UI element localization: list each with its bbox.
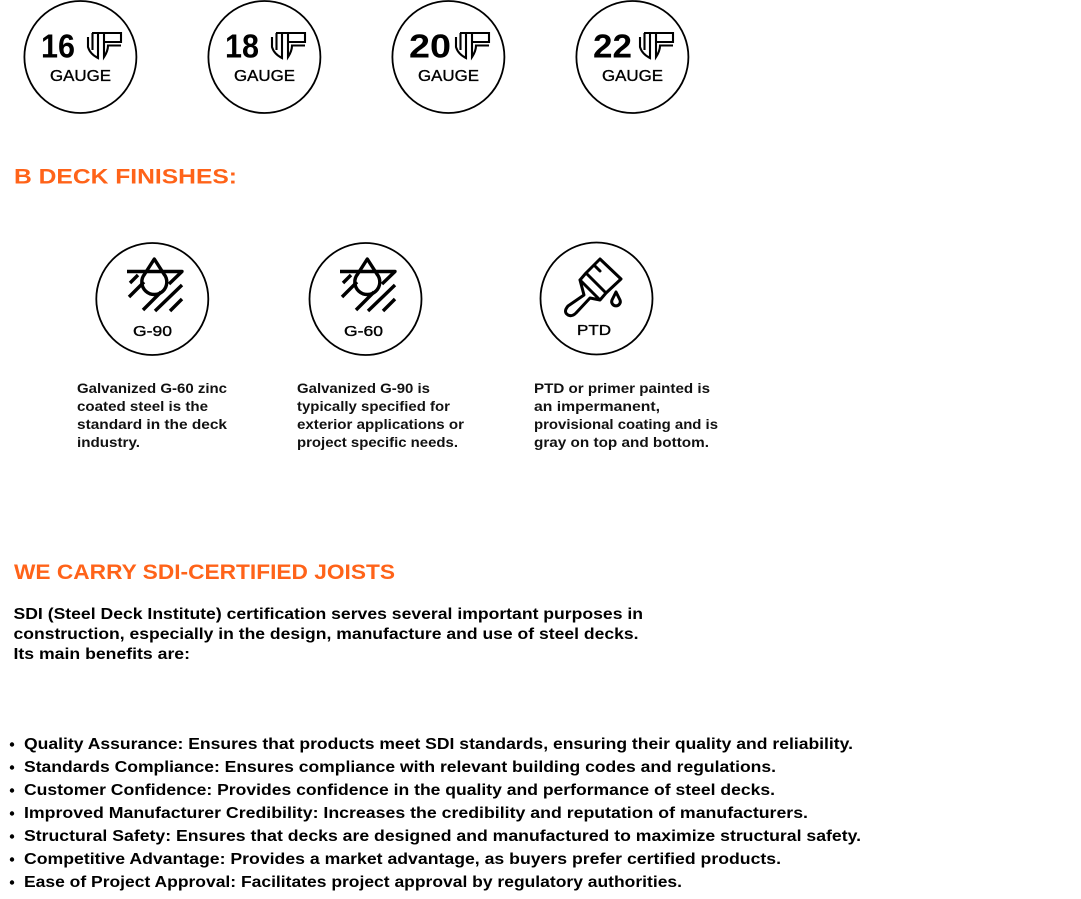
badge: 18 gauge bbox=[208, 1, 320, 113]
text block: SDI intro: SDI (Steel Deck Institute) certification serves several important purposes in bbox=[14, 606, 643, 623]
badge: 16 gauge: GAUGE bbox=[50, 68, 111, 85]
badge: 22 gauge: GAUGE bbox=[602, 68, 663, 85]
text block: PTD description: an impermanent, bbox=[534, 399, 660, 414]
badge: 16 gauge bbox=[24, 1, 136, 113]
icon: water drop on galvanized surface bbox=[340, 259, 395, 311]
list: SDI benefits: Structural Safety: Ensures that decks are designed and manufactured to maximize structural safety. bbox=[24, 828, 861, 845]
badge: 22 gauge bbox=[576, 1, 688, 113]
badge: 20 gauge: GAUGE bbox=[418, 68, 479, 85]
panel: G-90 finish bbox=[96, 243, 208, 355]
list: SDI benefits: Quality Assurance: Ensures that products meet SDI standards, ensuring their quality and reliability. bbox=[24, 736, 853, 753]
text block: SDI intro bbox=[14, 606, 643, 663]
text block: G-90 description: Galvanized G-90 is bbox=[297, 381, 430, 396]
panel: PTD finish: PTD bbox=[577, 323, 611, 339]
list: SDI benefits: Improved Manufacturer Credibility: Increases the credibility and reputation of manufacturers. bbox=[24, 805, 808, 822]
badge: 18 gauge: 18 bbox=[225, 28, 259, 64]
icon: caliper 20 bbox=[456, 33, 489, 58]
badge: 18 gauge: GAUGE bbox=[234, 68, 295, 85]
text block: G-60 description: coated steel is the bbox=[77, 399, 209, 414]
text block: G-60 description bbox=[77, 381, 228, 450]
heading: B deck finishes: B DECK FINISHES: bbox=[14, 164, 237, 188]
text block: G-90 description: typically specified for bbox=[297, 399, 451, 414]
panel: G-90 finish: G-90 bbox=[133, 324, 172, 340]
text block: PTD description: gray on top and bottom. bbox=[534, 435, 709, 450]
list: SDI benefits bbox=[10, 736, 861, 891]
text block: PTD description bbox=[534, 381, 718, 450]
text block: G-90 description: project specific needs. bbox=[297, 435, 458, 450]
list: SDI benefits: Standards Compliance: Ensures compliance with relevant building codes and regulations. bbox=[24, 759, 776, 776]
badge: 16 gauge: 16 bbox=[41, 28, 75, 64]
badge: 22 gauge: 22 bbox=[593, 28, 632, 64]
icon: caliper 18 bbox=[272, 33, 305, 58]
text block: PTD description: provisional coating and is bbox=[534, 417, 718, 432]
icon: paint brush bbox=[566, 259, 621, 316]
list: SDI benefits: Ease of Project Approval: Facilitates project approval by regulatory authorities. bbox=[24, 874, 682, 891]
icon: water drop on galvanized surface bbox=[127, 259, 182, 311]
text block: G-90 description: exterior applications or bbox=[297, 417, 465, 432]
text block: SDI intro: Its main benefits are: bbox=[14, 646, 190, 663]
panel: G-60 finish bbox=[310, 243, 422, 355]
text block: PTD description: PTD or primer painted is bbox=[534, 381, 710, 396]
text block: G-60 description: Galvanized G-60 zinc bbox=[77, 381, 228, 396]
list: SDI benefits: Customer Confidence: Provides confidence in the quality and performance of steel decks. bbox=[24, 782, 775, 799]
badge: 20 gauge bbox=[392, 1, 504, 113]
panel: PTD finish bbox=[540, 242, 652, 354]
list: SDI benefits: Competitive Advantage: Provides a market advantage, as buyers prefer certified products. bbox=[24, 851, 781, 868]
panel: G-60 finish: G-60 bbox=[344, 324, 383, 340]
icon: caliper 16 bbox=[88, 33, 121, 58]
icon: caliper 22 bbox=[640, 33, 673, 58]
text block: G-60 description: standard in the deck bbox=[77, 417, 228, 432]
text block: SDI intro: construction, especially in the design, manufacture and use of steel decks. bbox=[14, 626, 638, 643]
text block: G-90 description bbox=[297, 381, 465, 450]
badge: 20 gauge: 20 bbox=[409, 28, 451, 64]
text block: G-60 description: industry. bbox=[77, 435, 140, 450]
heading: SDI-certified joists: WE CARRY SDI-CERTIFIED JOISTS bbox=[14, 560, 395, 584]
